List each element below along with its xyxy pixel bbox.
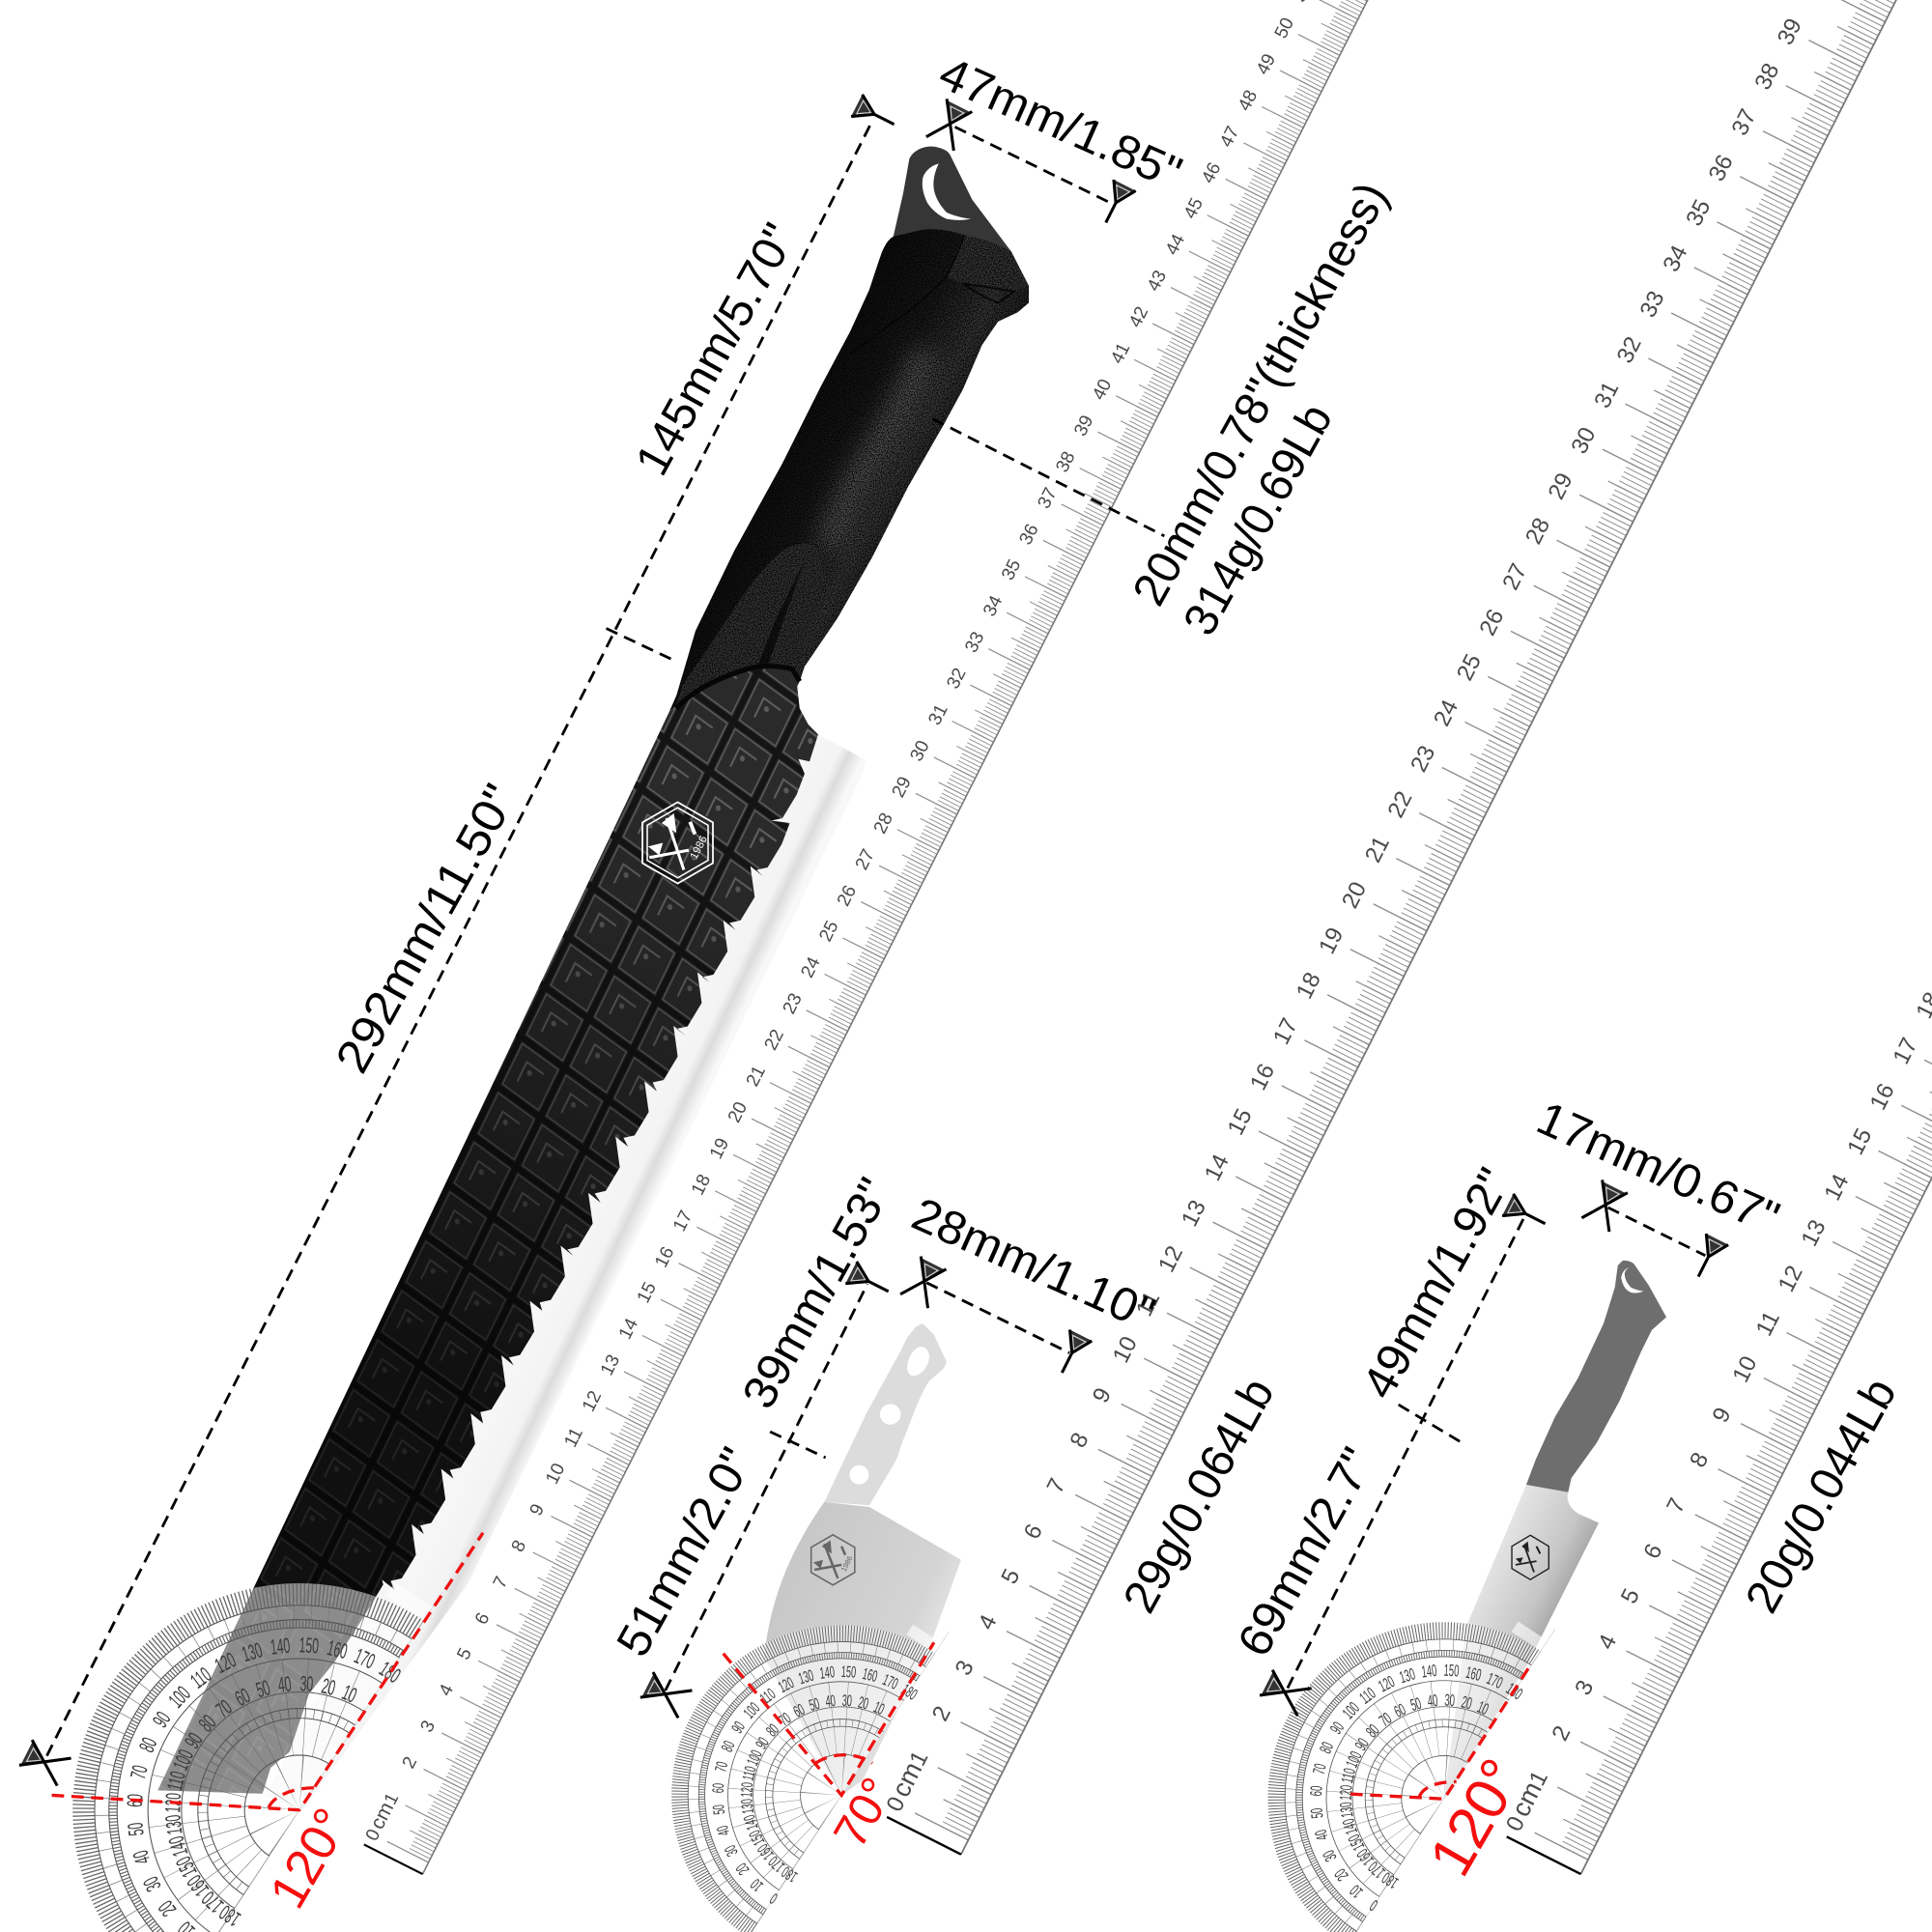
handle: collar crease (850, 235, 1014, 355)
ruler: large knife: 18 (688, 1171, 715, 1199)
ruler: cleaver: 28 (1520, 514, 1555, 549)
protractor: large knife: 80 (134, 1734, 161, 1755)
ruler: large knife: 4 (436, 1681, 458, 1699)
ruler: large knife: 30 (906, 737, 934, 765)
ruler: large knife: 7 (490, 1574, 512, 1592)
protractor: large knife: 40 (128, 1848, 155, 1867)
ruler: large knife: 47 (1216, 124, 1243, 151)
ruler: small chef knife: 13 (1796, 1216, 1832, 1251)
ruler: large knife: 14 (615, 1315, 642, 1343)
protractor: small chef knife: 80 (1316, 1739, 1337, 1756)
protractor: small chef knife: 160 (1352, 1845, 1378, 1869)
ruler: cleaver: 36 (1704, 151, 1739, 185)
ruler: cleaver: 10 (1108, 1332, 1143, 1367)
protractor: large knife: 140 (164, 1833, 192, 1860)
protractor: large knife: 130 (240, 1638, 265, 1666)
label: weight large knife: 314g/0.69Lb (1174, 395, 1343, 643)
ruler: cleaver: 5 (996, 1565, 1025, 1588)
cleaver logo: 1986 (839, 1554, 854, 1573)
ruler: cleaver: 25 (1452, 650, 1487, 685)
protractor: large knife: 120 (212, 1648, 240, 1678)
ruler: cleaver: 6 (1019, 1520, 1048, 1544)
protractor: cleaver: 10 (871, 1698, 887, 1719)
protractor: cleaver: 70 (776, 1709, 794, 1729)
protractor: cleaver: 10 (747, 1875, 767, 1895)
ruler: cleaver: 35 (1681, 195, 1716, 230)
ruler: cleaver: 31 (1589, 378, 1624, 412)
ruler: large knife: 33 (961, 629, 988, 656)
marker: blade end (639, 1671, 692, 1718)
ruler: large knife: 38 (1052, 448, 1080, 476)
ruler: large knife: 16 (651, 1243, 678, 1271)
dimension lines: cleaver (639, 1256, 1092, 1718)
ruler: large knife: 6 (471, 1609, 494, 1628)
protractor: large knife: 60 (231, 1684, 254, 1711)
protractor: cleaver: 180 (898, 1681, 921, 1703)
protractor: cleaver: 120 (776, 1673, 797, 1696)
angle lines: large knife (52, 1533, 483, 1810)
marker: blade end (18, 1739, 71, 1786)
ruler: cleaver: 32 (1612, 332, 1647, 367)
ruler: cleaver: 37 (1726, 105, 1762, 140)
ruler: large knife: 23 (780, 990, 807, 1017)
protractor: small chef knife: 20 (1330, 1865, 1351, 1885)
ruler: cleaver: 26 (1474, 605, 1509, 639)
protractor: cleaver: 130 (738, 1798, 757, 1815)
protractor: large knife: 110 (162, 1769, 190, 1793)
protractor: cleaver: 180 (779, 1862, 801, 1886)
ruler: large knife: 31 (924, 701, 952, 728)
protractor: cleaver: 20 (857, 1693, 870, 1713)
ruler: large knife: 20 (724, 1098, 752, 1126)
ruler: cleaver: 38 (1749, 59, 1784, 94)
protractor: small chef knife: 90 (1326, 1719, 1348, 1737)
protractor: small chef knife: 60 (1306, 1785, 1325, 1797)
ruler: large knife: 24 (797, 953, 825, 981)
ruler: large knife: 29 (889, 774, 916, 801)
angle label: large knife: 120° (260, 1800, 360, 1918)
protractor: large knife: 150 (298, 1634, 320, 1658)
ruler: large knife: 10 (542, 1461, 569, 1488)
marker: width start (926, 99, 973, 151)
protractor: small chef knife: 80 (1362, 1720, 1383, 1741)
ruler: cleaver: 30 (1566, 423, 1601, 458)
protractor: cleaver: 80 (762, 1720, 782, 1740)
ruler: cleaver: 24 (1429, 696, 1463, 730)
marker: width start (1581, 1179, 1629, 1232)
protractor: cleaver (592, 1539, 955, 1932)
ruler: cleaver: 22 (1382, 787, 1417, 822)
ruler: small chef knife: 9 (1707, 1404, 1737, 1427)
protractor: cleaver: 110 (739, 1765, 759, 1782)
ruler: cleaver: 9 (1088, 1383, 1117, 1407)
ruler: cleaver: 27 (1497, 559, 1532, 594)
ruler: cleaver: 34 (1658, 242, 1692, 276)
protractor: large knife (0, 1467, 451, 1932)
ruler: cleaver: 13 (1177, 1196, 1211, 1231)
ruler: cleaver: 11 (1131, 1288, 1165, 1321)
protractor: large knife: 160 (325, 1635, 350, 1663)
protractor: small chef knife: 160 (1463, 1662, 1484, 1685)
protractor: small chef knife: 150 (1344, 1832, 1368, 1854)
protractor: large knife: 120 (160, 1792, 185, 1813)
protractor: cleaver: 140 (740, 1813, 761, 1833)
ruler: small chef knife: 1 (1524, 1767, 1553, 1790)
marker: handle end (851, 95, 899, 135)
ruler: large knife: 25 (815, 918, 843, 945)
label: weight chef knife: 20g/0.044Lb (1736, 1370, 1907, 1621)
ruler: small chef knife: 12 (1774, 1262, 1808, 1296)
cleaver logo (811, 1535, 855, 1585)
protractor: large knife: 30 (138, 1873, 166, 1895)
label: handle width large knife: 47mm/1.85" (931, 47, 1189, 200)
protractor: cleaver: 100 (740, 1699, 763, 1722)
protractor: cleaver: 150 (840, 1662, 857, 1681)
ruler: large knife: 15 (634, 1279, 661, 1306)
protractor: small chef knife: 180 (1503, 1679, 1526, 1703)
ruler: large knife: 36 (1016, 521, 1043, 549)
label: blade length large knife: 292mm/11.50" (326, 776, 526, 1081)
dimension lines: chef knife (1259, 1179, 1728, 1716)
chef knife handle (1526, 1261, 1666, 1492)
protractor: large knife: 70 (126, 1763, 153, 1781)
protractor: small chef knife: 110 (1337, 1766, 1359, 1785)
ruler: cleaver: 8 (1065, 1429, 1094, 1452)
handle: finger guard (676, 544, 824, 705)
protractor: cleaver: 70 (711, 1760, 731, 1774)
handle: grain texture (669, 229, 1029, 712)
handle: highlight (828, 352, 926, 549)
ruler: cleaver: 7 (1042, 1474, 1071, 1497)
handle: collar top face (947, 235, 1029, 292)
label: handle length large knife: 145mm/5.70" (626, 215, 807, 484)
ruler: cleaver: cm (886, 1757, 927, 1802)
ruler: cleaver: 2 (927, 1702, 956, 1725)
protractor: small chef knife: 170 (1364, 1858, 1388, 1883)
label: handle length cleaver: 39mm/1.53" (732, 1170, 901, 1417)
protractor: cleaver: 80 (718, 1738, 738, 1754)
protractor: large knife: 180 (215, 1900, 244, 1931)
ruler: cleaver: 4 (973, 1610, 1003, 1634)
ruler: large knife: 11 (560, 1425, 587, 1451)
angle lines: chef knife (1350, 1663, 1531, 1799)
ruler: large knife: 19 (706, 1135, 733, 1162)
ruler: large knife: 8 (508, 1537, 530, 1555)
protractor: large knife: 160 (183, 1870, 213, 1901)
ruler: small chef knife (1494, 709, 1932, 1874)
protractor: large knife: 50 (253, 1676, 272, 1702)
ruler: small chef knife: 2 (1547, 1721, 1576, 1745)
protractor: large knife: 100 (164, 1682, 195, 1713)
ruler: large knife: 0 (362, 1826, 384, 1844)
ruler: small chef knife: 17 (1888, 1034, 1923, 1068)
ruler: large knife: 28 (870, 810, 897, 838)
ruler: large knife: 40 (1089, 376, 1116, 404)
protractor: cleaver: 50 (807, 1694, 822, 1715)
protractor: small chef knife: 90 (1350, 1735, 1373, 1753)
ruler: large knife: 50 (1271, 14, 1298, 42)
ruler: large knife: 48 (1235, 87, 1262, 114)
logo on blade (642, 802, 713, 884)
ruler: cleaver: 15 (1223, 1104, 1258, 1139)
protractor: large knife: 90 (180, 1728, 208, 1752)
ruler: small chef knife: 15 (1842, 1124, 1877, 1159)
angle label: chef knife: 120° (1416, 1747, 1535, 1887)
ruler: small chef knife: 6 (1638, 1540, 1667, 1563)
protractor: large knife: 60 (123, 1793, 147, 1807)
protractor: cleaver: 60 (790, 1700, 808, 1720)
ruler: small chef knife: 3 (1570, 1676, 1599, 1699)
marker: width end (1688, 1234, 1728, 1282)
ruler: cleaver: 23 (1406, 742, 1440, 777)
protractor: cleaver: 60 (709, 1782, 727, 1794)
protractor: cleaver: 120 (737, 1782, 756, 1798)
protractor: cleaver: 170 (765, 1853, 788, 1876)
label: blade length cleaver: 51mm/2.0" (607, 1439, 763, 1665)
protractor: small chef knife: 50 (1306, 1807, 1326, 1820)
marker: width start (900, 1256, 948, 1308)
ruler: large knife: 3 (417, 1718, 440, 1736)
protractor: cleaver: 40 (713, 1824, 733, 1838)
protractor: cleaver: 30 (841, 1691, 852, 1710)
protractor: small chef knife: 140 (1338, 1816, 1361, 1836)
logo on blade: 1986 (689, 834, 710, 862)
protractor: cleaver: 50 (709, 1804, 728, 1816)
protractor: large knife: 110 (186, 1662, 215, 1693)
ruler: cleaver: 14 (1200, 1151, 1235, 1185)
ruler: large knife: 41 (1107, 340, 1134, 367)
ruler: large knife: 39 (1070, 412, 1098, 440)
protractor: large knife: 130 (160, 1813, 186, 1836)
protractor: cleaver: 0 (767, 1889, 781, 1907)
protractor: large knife: 50 (123, 1821, 149, 1837)
ruler: large knife (357, 0, 1406, 1874)
protractor: small chef knife: 40 (1427, 1690, 1439, 1711)
protractor: small chef knife: 100 (1342, 1748, 1365, 1770)
ruler: small chef knife: 11 (1751, 1307, 1785, 1340)
ruler: cleaver: 29 (1543, 469, 1578, 503)
protractor: large knife: 70 (212, 1695, 237, 1722)
chef knife logo (1512, 1535, 1548, 1579)
protractor: large knife: 80 (194, 1710, 220, 1736)
protractor: cleaver: 170 (880, 1670, 900, 1693)
protractor: small chef knife: 10 (1346, 1881, 1366, 1902)
protractor: large knife: 20 (320, 1674, 338, 1700)
protractor: cleaver: 20 (732, 1860, 753, 1879)
protractor: small chef knife: 30 (1319, 1847, 1340, 1865)
protractor: large knife: 170 (351, 1644, 379, 1674)
handle: guard crease (758, 560, 805, 666)
ruler: large knife: 43 (1144, 268, 1171, 295)
protractor: small chef knife: 140 (1420, 1661, 1438, 1681)
ruler: large knife: 21 (743, 1063, 770, 1090)
ruler: small chef knife: 16 (1865, 1079, 1900, 1114)
protractor: small chef knife: 60 (1391, 1699, 1408, 1721)
protractor: cleaver: 100 (743, 1747, 766, 1768)
protractor: small chef knife: 20 (1460, 1691, 1474, 1713)
blade: black serrated patterned body (157, 653, 818, 1794)
label: handle length chef knife: 49mm/1.92" (1352, 1160, 1521, 1407)
protractor: cleaver: 160 (753, 1840, 778, 1863)
marker: width end (1094, 180, 1136, 228)
ruler: cleaver (875, 0, 1932, 1855)
ruler: cleaver: 1 (904, 1747, 933, 1770)
protractor: small chef knife: 0 (1366, 1896, 1381, 1915)
protractor: large knife: 140 (269, 1634, 292, 1660)
ruler: large knife: 35 (998, 556, 1025, 583)
protractor: large knife: 180 (375, 1657, 405, 1688)
ruler: large knife: 37 (1034, 485, 1062, 512)
ruler: cleaver: 39 (1773, 14, 1807, 49)
angle lines: cleaver (724, 1642, 934, 1795)
ruler: small chef knife: 0 (1501, 1812, 1530, 1835)
protractor: small chef knife (1185, 1532, 1562, 1932)
protractor: small chef knife: 130 (1397, 1663, 1417, 1687)
ruler: cleaver: 21 (1360, 832, 1395, 867)
ruler: small chef knife: 5 (1616, 1584, 1645, 1607)
label: weight cleaver: 29g/0.064Lb (1114, 1370, 1285, 1621)
protractor: cleaver: 110 (756, 1685, 779, 1708)
protractor: large knife: 150 (171, 1853, 202, 1881)
handle: lanyard loop with crescent hole (894, 147, 1029, 286)
protractor: large knife: 30 (299, 1671, 314, 1696)
protractor: cleaver: 140 (819, 1662, 836, 1683)
ruler: small chef knife: cm (1506, 1777, 1548, 1821)
protractor: large knife: 170 (197, 1887, 228, 1918)
protractor: small chef knife: 10 (1475, 1697, 1492, 1719)
protractor: large knife: 10 (339, 1680, 360, 1708)
ruler: large knife: 13 (597, 1351, 624, 1378)
ruler: cleaver: 19 (1314, 923, 1349, 958)
knife: small chef knife (1444, 1261, 1666, 1799)
ruler: large knife: 1 (381, 1790, 403, 1808)
ruler: cleaver: 33 (1634, 287, 1670, 322)
cleaver tang with holes (824, 1323, 947, 1505)
dimension lines: large knife (18, 95, 1164, 1786)
label: thickness large knife: 20mm/0.78"(thickness) (1122, 174, 1399, 614)
cleaver blade (764, 1502, 961, 1795)
protractor: cleaver: 90 (728, 1719, 749, 1737)
protractor: cleaver: 150 (746, 1827, 768, 1849)
ruler: large knife: 49 (1253, 51, 1280, 78)
protractor: small chef knife: 150 (1443, 1661, 1460, 1680)
ruler: large knife: 34 (980, 592, 1008, 620)
protractor: small chef knife: 50 (1408, 1693, 1424, 1715)
protractor: large knife: 100 (168, 1747, 198, 1774)
protractor: small chef knife: 180 (1378, 1868, 1402, 1893)
knife: large black serrated knife (157, 147, 1029, 1811)
marker: handle end (1502, 1194, 1550, 1235)
protractor: large knife: 40 (276, 1672, 293, 1697)
ruler: small chef knife: 14 (1819, 1170, 1854, 1205)
protractor: small chef knife: 170 (1484, 1668, 1506, 1692)
ruler: large knife: 22 (761, 1026, 788, 1054)
blade: polished edge (265, 734, 867, 1811)
marker: handle end (845, 1262, 894, 1302)
marker: width end (1051, 1330, 1092, 1378)
protractor: cleaver: 130 (796, 1666, 815, 1688)
protractor: small chef knife: 130 (1336, 1801, 1356, 1819)
label: width cleaver: 28mm/1.10" (904, 1188, 1162, 1341)
ruler: small chef knife: 8 (1685, 1448, 1714, 1471)
ruler: large knife: 17 (669, 1208, 696, 1235)
ruler: large knife: 26 (834, 882, 861, 910)
protractor: small chef knife: 30 (1444, 1690, 1456, 1710)
protractor: cleaver: 160 (861, 1664, 879, 1686)
protractor: small chef knife: 110 (1355, 1683, 1379, 1707)
protractor: cleaver: 90 (753, 1734, 773, 1752)
protractor: cleaver: 30 (721, 1842, 742, 1860)
ruler: large knife: 9 (526, 1501, 549, 1520)
ruler: cleaver: 18 (1292, 968, 1326, 1003)
knife: cleaver (764, 1323, 961, 1795)
ruler: large knife: 42 (1125, 303, 1152, 331)
handle: bolster shadow (676, 667, 800, 708)
ruler: large knife: cm (366, 1799, 398, 1833)
protractor: small chef knife: 40 (1310, 1828, 1332, 1843)
ruler: large knife: 12 (579, 1388, 606, 1415)
ruler: small chef knife: 10 (1727, 1352, 1762, 1387)
ruler: large knife: 32 (943, 665, 971, 693)
label: width chef knife: 17mm/0.67" (1529, 1092, 1787, 1245)
protractor: small chef knife: 100 (1338, 1698, 1363, 1722)
protractor: small chef knife: 70 (1376, 1709, 1395, 1730)
marker: blade end (1259, 1669, 1312, 1716)
ruler: large knife: 45 (1180, 195, 1208, 222)
ruler: cleaver: 12 (1153, 1241, 1188, 1276)
protractor: small chef knife: 120 (1376, 1671, 1398, 1695)
ruler: large knife: 5 (453, 1645, 476, 1663)
protractor: small chef knife: 120 (1336, 1784, 1355, 1801)
chef knife blade (1444, 1485, 1599, 1799)
ruler: cleaver: 20 (1337, 878, 1372, 913)
handle: textured grip (669, 229, 1029, 712)
ruler: small chef knife: 7 (1662, 1494, 1690, 1518)
ruler: cleaver: 3 (951, 1657, 980, 1680)
ruler: cleaver: 17 (1268, 1014, 1303, 1049)
ruler: large knife: 46 (1198, 159, 1225, 186)
ruler: cleaver: 16 (1245, 1060, 1280, 1094)
ruler: large knife: 2 (399, 1753, 421, 1772)
angle label: cleaver: 70° (824, 1769, 904, 1857)
ruler: large knife: 27 (852, 846, 879, 873)
label: blade length chef knife: 69mm/2.7" (1228, 1439, 1384, 1665)
protractor: small chef knife: 70 (1309, 1761, 1329, 1776)
protractor: cleaver: 40 (825, 1691, 837, 1711)
ruler: small chef knife: 4 (1593, 1631, 1622, 1654)
ruler: large knife: 44 (1162, 231, 1189, 259)
protractor: large knife: 20 (154, 1896, 181, 1921)
ruler: cleaver: 0 (881, 1793, 911, 1816)
protractor: large knife: 90 (148, 1708, 176, 1732)
